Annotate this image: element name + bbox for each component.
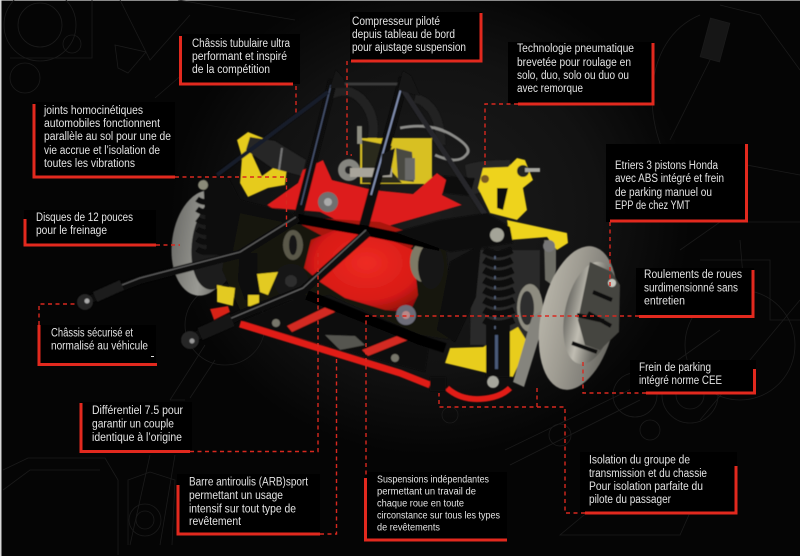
rubber mount: [318, 192, 338, 212]
callout: joints homocinétiques: vie accrue et l’isolation de: [44, 145, 160, 157]
callout: châssis tubulaire: performant et inspiré: [192, 51, 287, 63]
callout: disques: Disques de 12 pouces: [36, 212, 133, 224]
axle disc: [274, 264, 308, 298]
right shock absorber: [484, 250, 514, 388]
callout: châssis sécurisé: normalisé au véhicule: [51, 340, 148, 352]
callout: frein de parking: [639, 362, 754, 393]
callout: joints homocinétiques: toutes les vibrations: [44, 158, 135, 170]
callout: suspensions: permettant un travail de: [377, 486, 476, 498]
coil backdrop: [470, 250, 540, 345]
callout: technologie pneumatique: Technologie pneumatique: [517, 43, 634, 55]
callout: compresseur: pour ajustage suspension: [352, 42, 466, 54]
callout: compresseur: Compresseur piloté: [352, 16, 440, 28]
lower front bar: [181, 230, 368, 349]
callout: roulements: [639, 269, 753, 316]
callout: isolation: transmission et du chassie: [589, 468, 707, 480]
dashed leader lines: [39, 61, 646, 534]
wheel bearing: [517, 284, 543, 332]
right disc: [527, 239, 629, 397]
small red bracket: [210, 306, 230, 320]
callout: disques: pour le freinage: [36, 225, 107, 237]
callout: barre antiroulis: Barre antiroulis (ARB)sport: [189, 476, 309, 488]
callout: barre antiroulis: intensif sur tout type de: [189, 504, 296, 516]
right upright: [513, 307, 547, 387]
right air spring: [433, 160, 510, 196]
callout: roulements: surdimensionné sans: [644, 282, 738, 294]
callout: différentiel: garantir un couple: [92, 418, 174, 430]
callout: isolation: Pour isolation parfaite du: [589, 481, 703, 493]
callout: différentiel: Différentiel 7.5 pour: [92, 405, 183, 417]
undertray: [240, 295, 430, 372]
callout: isolation: pilote du passager: [589, 494, 671, 506]
callout: compresseur: [351, 13, 481, 61]
callout: châssis tubulaire: [180, 36, 293, 84]
callout: étriers: Etriers 3 pistons Honda: [615, 160, 719, 172]
callout: technologie pneumatique: brevetée pour roulage en: [517, 57, 631, 69]
callout: différentiel: [81, 403, 190, 452]
callout: frein de parking: Frein de parking: [639, 362, 711, 374]
callout: étriers: [610, 144, 746, 221]
callout: suspensions: Suspensions indépendantes: [377, 474, 489, 486]
callout: technologie pneumatique: solo, duo, solo ou duo ou: [517, 70, 629, 82]
callout: barre antiroulis: revêtement: [189, 516, 242, 528]
callout: roulements: Roulements de roues: [644, 269, 742, 281]
left yellow mount: [237, 132, 287, 197]
callout: joints homocinétiques: joints homocinétiques: [43, 105, 143, 117]
silver hose: [400, 126, 468, 160]
callout: disques: [25, 212, 156, 245]
frame cross tubes: [298, 219, 445, 348]
right black plate: [437, 245, 481, 342]
main illustration: suspension assembly: [77, 70, 629, 399]
callout: suspensions: chaque roue en toute: [377, 498, 464, 510]
left air spring: [246, 137, 306, 176]
red upper frame: [267, 160, 462, 250]
left lower yellow parts: [217, 272, 278, 306]
compressor: [338, 126, 432, 184]
callout: étriers: de parking manuel ou: [615, 187, 712, 199]
callout: roulements: entretien: [644, 296, 685, 308]
callout: différentiel: identique à l’origine: [92, 432, 182, 444]
callout: technologie pneumatique: [517, 43, 653, 104]
callout: châssis sécurisé: Châssis sécurisé et: [51, 328, 134, 340]
yellow upper arm: [507, 220, 568, 252]
callout: étriers: avec ABS intégré et frein: [615, 173, 724, 185]
upper link: [544, 240, 556, 285]
callout: joints homocinétiques: parallèle au sol pour une de: [44, 131, 171, 143]
dark chassis filling: [222, 205, 455, 340]
left disc: [165, 186, 246, 300]
red differential: [304, 230, 418, 312]
callout: suspensions: de revêtements: [377, 522, 440, 534]
right yellow mount: [478, 158, 540, 220]
callout: barre antiroulis: permettant un usage: [189, 490, 283, 502]
left black plate: [198, 176, 293, 255]
callout: barre antiroulis: [178, 476, 320, 534]
callout: isolation: [585, 454, 736, 513]
back hoop: [327, 91, 441, 145]
upper right black bracket: [395, 213, 513, 252]
callout: technologie pneumatique: avec remorque: [517, 83, 583, 95]
right CV joint: [410, 242, 444, 289]
rubber mount right: [396, 305, 416, 325]
callout: châssis tubulaire: Châssis tubulaire ultra: [192, 38, 291, 50]
left black upright: [238, 253, 258, 300]
brackets on undertray: [272, 306, 408, 362]
callout: châssis sécurisé: [39, 325, 157, 364]
left CV joint: [283, 230, 303, 260]
callout: châssis tubulaire: de la compétition: [192, 64, 270, 76]
callout: isolation: Isolation du groupe de: [589, 454, 690, 466]
callout: suspensions: [366, 474, 507, 540]
yellow lower arm: [445, 327, 528, 377]
red anti-roll bar: [240, 324, 510, 399]
callout: suspensions: circonstance sur tous les types: [377, 510, 500, 522]
hoop peaks: [330, 70, 420, 176]
long front bar: [77, 217, 298, 310]
left coil: [197, 199, 214, 252]
callout: joints homocinétiques: automobiles fonctionnent: [44, 118, 161, 130]
callout: étriers: EPP de chez YMT: [615, 200, 690, 212]
callout: frein de parking: intégré norme CEE: [639, 375, 722, 387]
callout: compresseur: depuis tableau de bord: [352, 29, 455, 41]
callout: joints homocinétiques: [34, 104, 175, 177]
top frame hoop: [217, 78, 486, 226]
